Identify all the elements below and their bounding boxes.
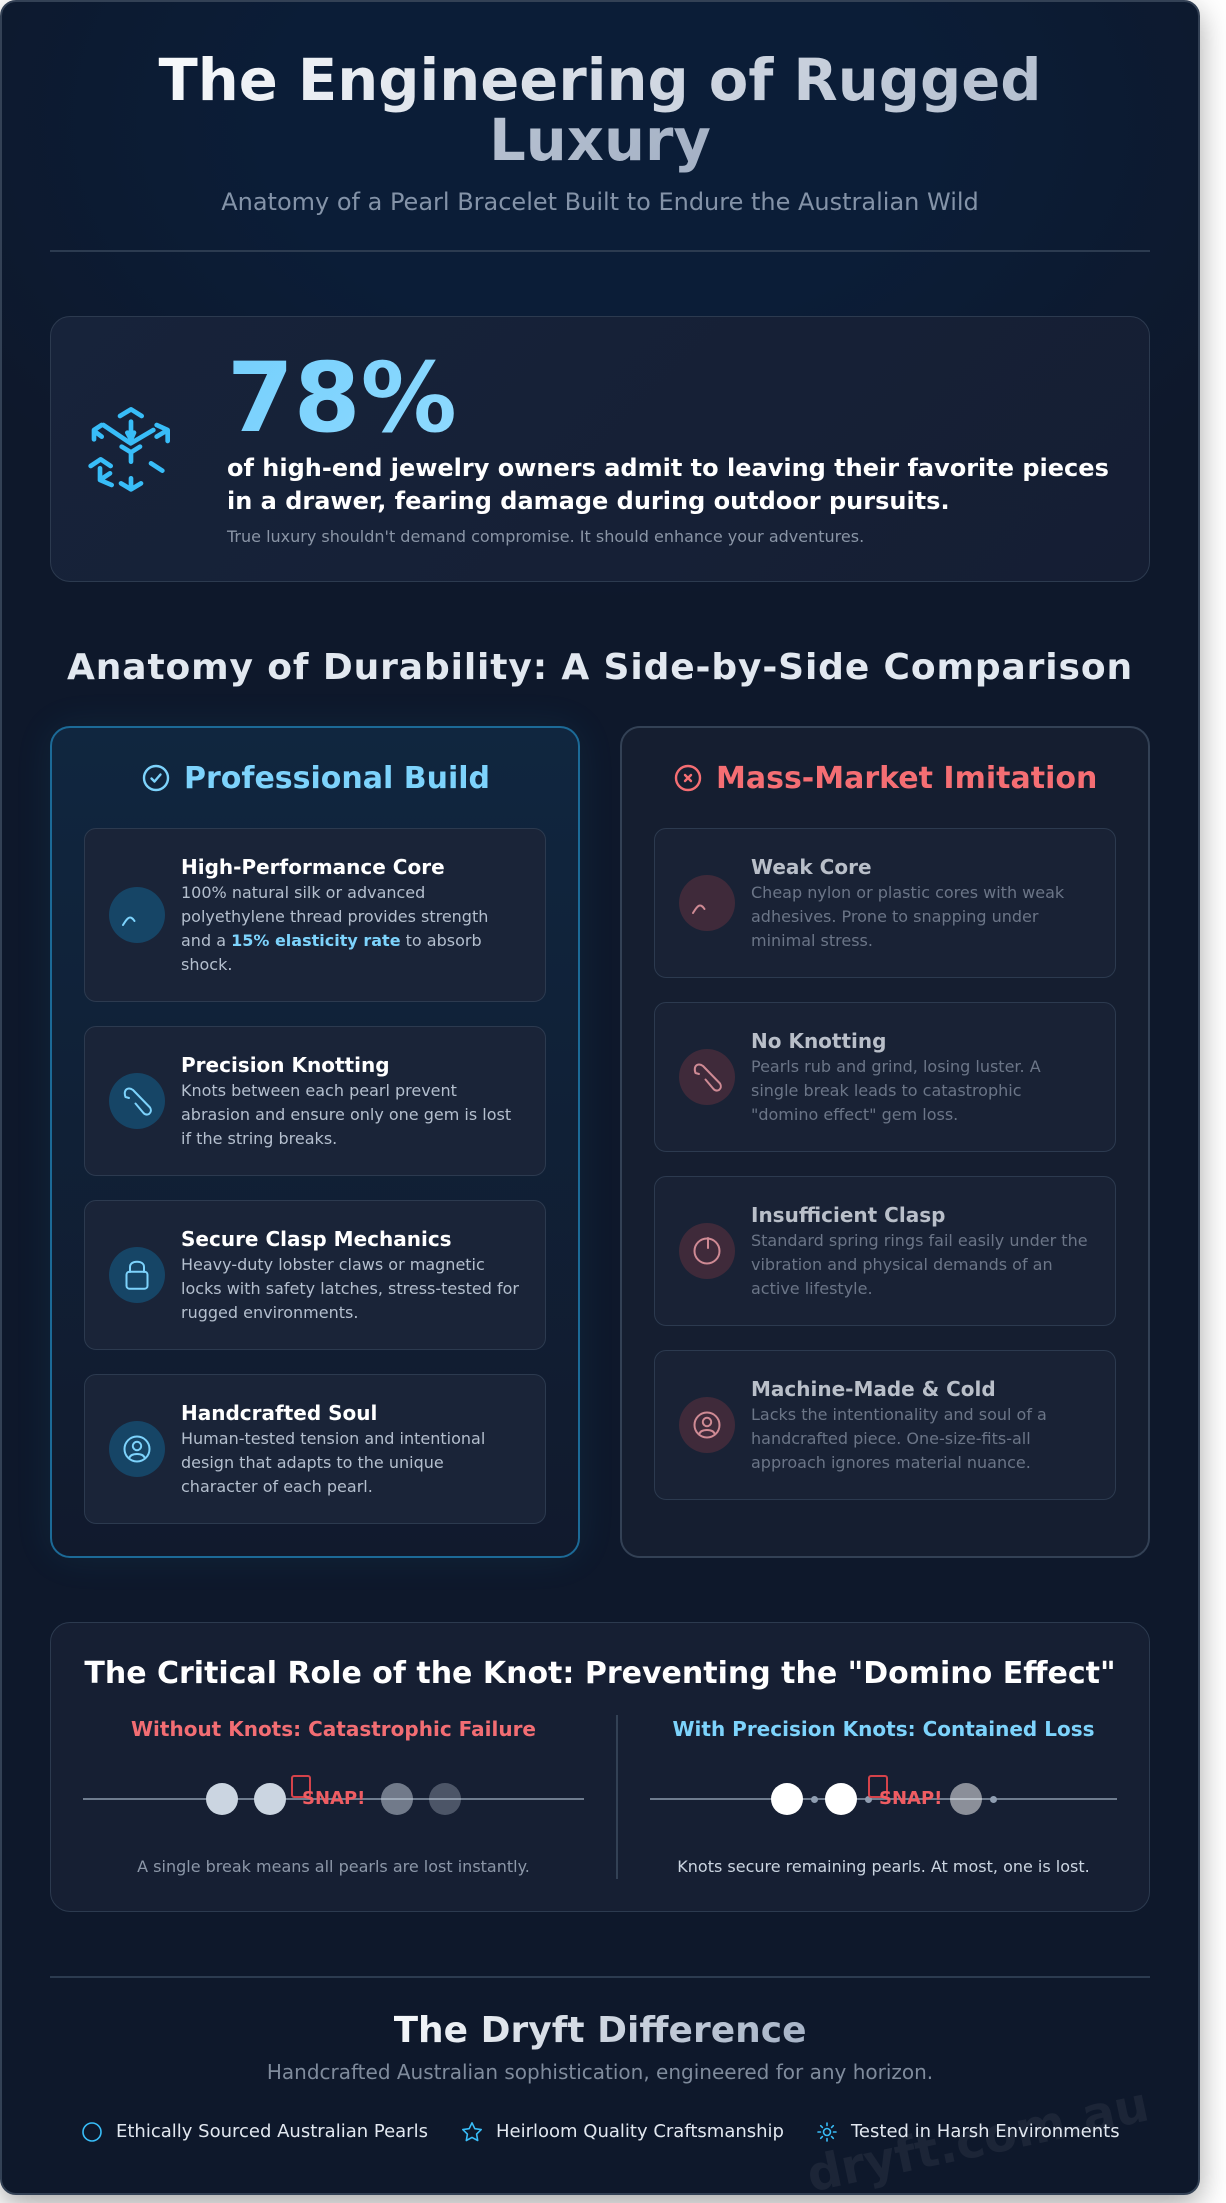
heading: mass-market imitation: Mass-Market Imitation <box>716 761 1097 796</box>
item: precision knotting <box>84 1026 546 1176</box>
footer heading: The Dryft Difference <box>394 2010 806 2051</box>
panel: hero statistic <box>50 316 1150 582</box>
pearls: unknotted strand <box>206 1783 461 1815</box>
footer tagline: Handcrafted Australian sophistication, engineered for any horizon. <box>267 2060 933 2084</box>
item: precision knotting: Precision Knotting <box>181 1053 390 1077</box>
item: insufficient clasp <box>654 1176 1116 1326</box>
item: weak core: adhesives. Prone to snapping under <box>751 907 1038 926</box>
label: snap: SNAP! <box>879 1788 942 1809</box>
item: no knotting <box>654 1002 1116 1152</box>
item: secure clasp mechanics: rugged environments. <box>181 1303 358 1322</box>
break marker <box>868 1775 888 1798</box>
title: Luxury <box>489 107 711 174</box>
item: machine-made and cold: Machine-Made & Cold <box>751 1377 996 1401</box>
item: high-performance core: and a 15% elasticity rate to absorb <box>181 931 482 950</box>
heading: critical role of the knot: The Critical Role of the Knot: Preventing the "Domino Effect" <box>84 1656 1116 1691</box>
item: secure clasp mechanics <box>84 1200 546 1350</box>
panel: professional build <box>50 726 580 1558</box>
item: machine-made and cold: handcrafted piece. One-size-fits-all <box>751 1429 1031 1448</box>
panel: mass-market imitation <box>620 726 1150 1558</box>
item: weak core: minimal stress. <box>751 931 873 950</box>
item: weak core <box>654 828 1116 978</box>
item: secure clasp mechanics: Heavy-duty lobster claws or magnetic <box>181 1255 485 1274</box>
item: machine-made and cold: approach ignores material nuance. <box>751 1453 1031 1472</box>
title: The Engineering of Rugged <box>158 47 1042 114</box>
label: snap: SNAP! <box>302 1788 365 1809</box>
heading: professional build: Professional Build <box>184 761 490 796</box>
item: insufficient clasp: vibration and physical demands of an <box>751 1255 1053 1274</box>
subheading: with knots: With Precision Knots: Contained Loss <box>672 1717 1095 1741</box>
item: secure clasp mechanics: locks with safety latches, stress-tested for <box>181 1279 519 1298</box>
item: insufficient clasp: active lifestyle. <box>751 1279 873 1298</box>
item: handcrafted soul: Human-tested tension and intentional <box>181 1429 485 1448</box>
item: handcrafted soul: Handcrafted Soul <box>181 1401 377 1425</box>
item: high-performance core: shock. <box>181 955 232 974</box>
title <box>158 47 1042 174</box>
item: weak core: Cheap nylon or plastic cores with weak <box>751 883 1064 902</box>
item: no knotting: "domino effect" gem loss. <box>751 1105 958 1124</box>
break marker <box>291 1775 311 1798</box>
item: handcrafted soul: design that adapts to the unique <box>181 1453 444 1472</box>
item: high-performance core: 100% natural silk or advanced <box>181 883 425 902</box>
item: no knotting: Pearls rub and grind, losing luster. A <box>751 1057 1041 1076</box>
item: precision knotting: abrasion and ensure only one gem is lost <box>181 1105 511 1124</box>
item: insufficient clasp: Standard spring rings fail easily under the <box>751 1231 1088 1250</box>
item: secure clasp mechanics: Secure Clasp Mechanics <box>181 1227 452 1251</box>
diagram: with precision knots <box>650 1717 1117 1876</box>
statistic: 78%: 78% <box>227 342 457 454</box>
list: professional features <box>84 828 546 1524</box>
statement: of high-end jewelry owners admit to leaving their favorite pieces <box>227 454 1109 482</box>
panel: domino effect card <box>50 1622 1150 1912</box>
item: handcrafted soul <box>84 1374 546 1524</box>
statement: in a drawer, fearing damage during outdoor pursuits. <box>227 487 950 515</box>
item: high-performance core: polyethylene thread provides strength <box>181 907 488 926</box>
diagram: without knots <box>83 1717 584 1876</box>
supporting note: True luxury shouldn't demand compromise. It should enhance your adventures. <box>227 527 864 546</box>
item: high-performance core <box>84 828 546 1002</box>
item: no knotting: No Knotting <box>751 1029 886 1053</box>
pearls and knots: knotted strand <box>771 1783 997 1815</box>
icon: broken box <box>88 407 170 492</box>
caption: with knots: Knots secure remaining pearls. At most, one is lost. <box>677 1857 1090 1876</box>
subtitle: Anatomy of a Pearl Bracelet Built to Endure the Australian Wild <box>221 188 979 216</box>
section heading: Anatomy of Durability: A Side-by-Side Comparison <box>67 647 1133 688</box>
feature: heirloom quality: Heirloom Quality Craftsmanship <box>496 2121 784 2142</box>
item: insufficient clasp: Insufficient Clasp <box>751 1203 945 1227</box>
item: machine-made and cold: Lacks the intentionality and soul of a <box>751 1405 1047 1424</box>
list: imitation weaknesses <box>654 828 1116 1500</box>
item: machine-made and cold <box>654 1350 1116 1500</box>
item: high-performance core: High-Performance Core <box>181 855 445 879</box>
item: weak core: Weak Core <box>751 855 872 879</box>
item: no knotting: single break leads to catastrophic <box>751 1081 1022 1100</box>
caption: without knots: A single break means all pearls are lost instantly. <box>137 1857 530 1876</box>
subheading: without knots: Without Knots: Catastrophic Failure <box>131 1717 536 1741</box>
feature: ethically sourced: Ethically Sourced Australian Pearls <box>116 2121 428 2142</box>
feature: tested in harsh environments: Tested in Harsh Environments <box>851 2121 1120 2142</box>
statement <box>227 454 1109 515</box>
item: handcrafted soul: character of each pearl. <box>181 1477 373 1496</box>
item: precision knotting: Knots between each pearl prevent <box>181 1081 457 1100</box>
item: precision knotting: if the string breaks. <box>181 1129 337 1148</box>
